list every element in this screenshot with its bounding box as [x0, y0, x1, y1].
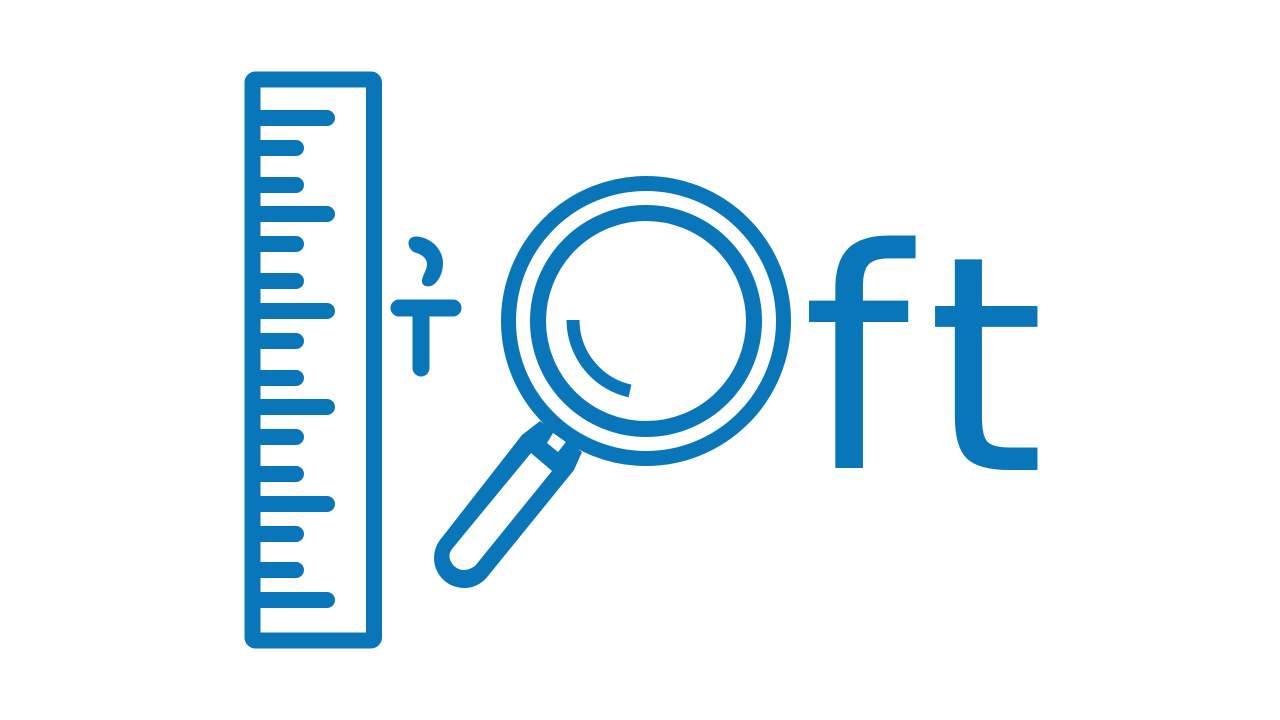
icon: ruler — [252, 80, 374, 640]
icon: small T mark with apostrophe — [399, 236, 453, 368]
lens highlight — [573, 320, 630, 391]
magnifier handle — [434, 421, 582, 588]
icon: magnifying glass — [434, 184, 784, 588]
magnifier inner ring — [538, 213, 754, 429]
unit label: ft: f — [802, 185, 917, 541]
magnifier outer ring — [508, 184, 784, 458]
unit label: ft — [802, 185, 1045, 541]
unit label: ft: t — [927, 192, 1045, 541]
